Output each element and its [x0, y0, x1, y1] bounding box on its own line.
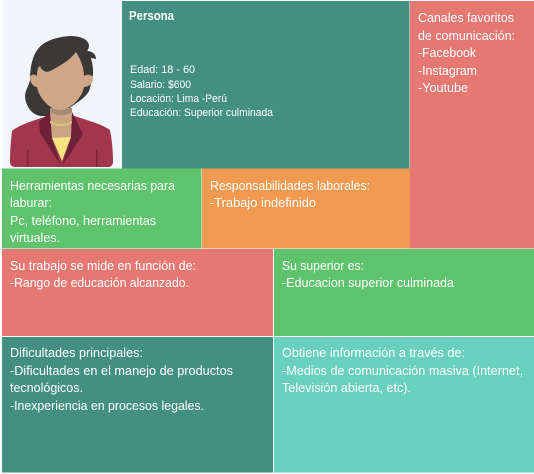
- text block: demographics: Edad: 18 - 60: [130, 64, 195, 76]
- panel: canales favoritos: [410, 1, 534, 248]
- panel: fuentes de información: -Medios de comunicación masiva (Internet,: [282, 364, 523, 378]
- panel: dificultades: -Inexperiencia en procesos legales.: [10, 399, 204, 413]
- panel: superior: [274, 249, 534, 336]
- text block: demographics: [130, 64, 274, 119]
- text block: demographics: Salario: $600: [130, 79, 191, 91]
- panel: fuentes de información: Televisión abierta, etc).: [282, 381, 411, 395]
- panel: canales favoritos: -Facebook: [418, 46, 477, 60]
- panel: dificultades: Dificultades principales:: [10, 346, 143, 360]
- panel: canales favoritos: de comunicación:: [418, 29, 515, 43]
- panel: superior: -Educacion superior culminada: [282, 276, 454, 290]
- panel: responsabilidades: [202, 168, 410, 248]
- panel: fuentes de información: [274, 337, 534, 472]
- panel: herramientas: Herramientas necesarias para: [10, 179, 175, 193]
- panel: portrait: [2, 0, 122, 168]
- panel: responsabilidades: Responsabilidades laborales:: [210, 179, 370, 193]
- panel: canales favoritos: Canales favoritos: [418, 11, 514, 25]
- icon: woman avatar: [10, 36, 113, 167]
- panel: herramientas: laburar:: [10, 196, 52, 210]
- panel: herramientas: virtuales.: [10, 231, 60, 245]
- panel: canales favoritos: -Youtube: [418, 81, 468, 95]
- text block: demographics: Locación: Lima -Perú: [130, 93, 227, 105]
- panel: dificultades: -Dificultades en el manejo de productos: [10, 364, 233, 378]
- panel: herramientas: Pc, teléfono, herramientas: [10, 214, 156, 228]
- panel: persona: [122, 1, 410, 168]
- panel: superior: Su superior es:: [282, 259, 364, 273]
- panel: medición del trabajo: [2, 249, 273, 336]
- panel: responsabilidades: -Trabajo indefinido: [210, 196, 316, 210]
- text block: demographics: Educación: Superior culminada: [130, 107, 274, 119]
- panel: herramientas: [2, 168, 202, 248]
- heading: Persona: Persona: [129, 9, 175, 23]
- panel: dificultades: tecnológicos.: [10, 381, 83, 395]
- panel: fuentes de información: Obtiene información a través de:: [282, 346, 465, 360]
- panel: medición del trabajo: Su trabajo se mide en función de:: [10, 259, 196, 273]
- panel: medición del trabajo: -Rango de educación alcanzado.: [10, 276, 189, 290]
- panel: canales favoritos: -Instagram: [418, 64, 477, 78]
- panel: dificultades: [2, 337, 273, 472]
